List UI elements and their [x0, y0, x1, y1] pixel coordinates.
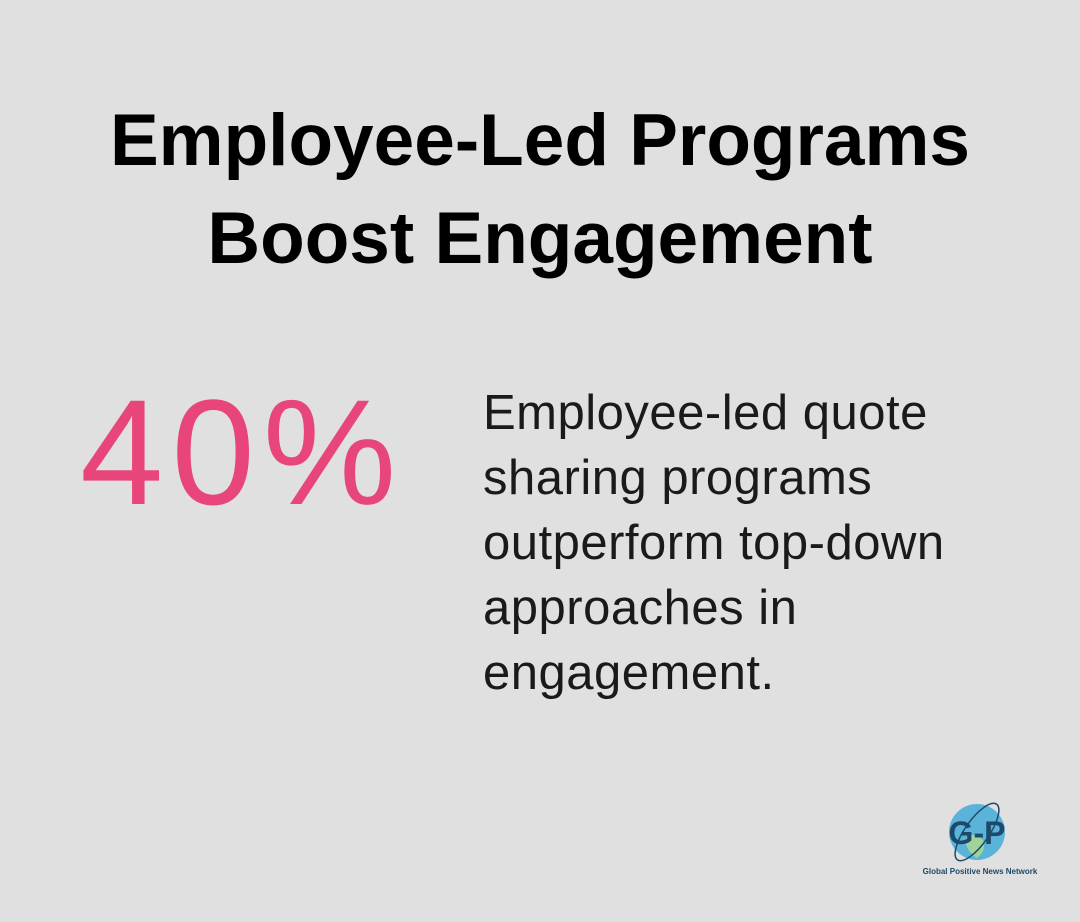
title: Boost Engagement	[207, 198, 873, 279]
title	[110, 100, 970, 279]
logo: G-P	[949, 815, 1005, 851]
description: approaches in	[483, 581, 797, 635]
logo	[923, 802, 1038, 876]
logo: Global Positive News Network	[923, 867, 1038, 876]
big stat: 40%	[80, 368, 404, 536]
description: engagement.	[483, 646, 775, 700]
description: Employee-led quote	[483, 386, 928, 440]
title: Employee-Led Programs	[110, 100, 970, 181]
description	[483, 386, 945, 700]
description: sharing programs	[483, 451, 872, 505]
description: outperform top-down	[483, 516, 945, 570]
